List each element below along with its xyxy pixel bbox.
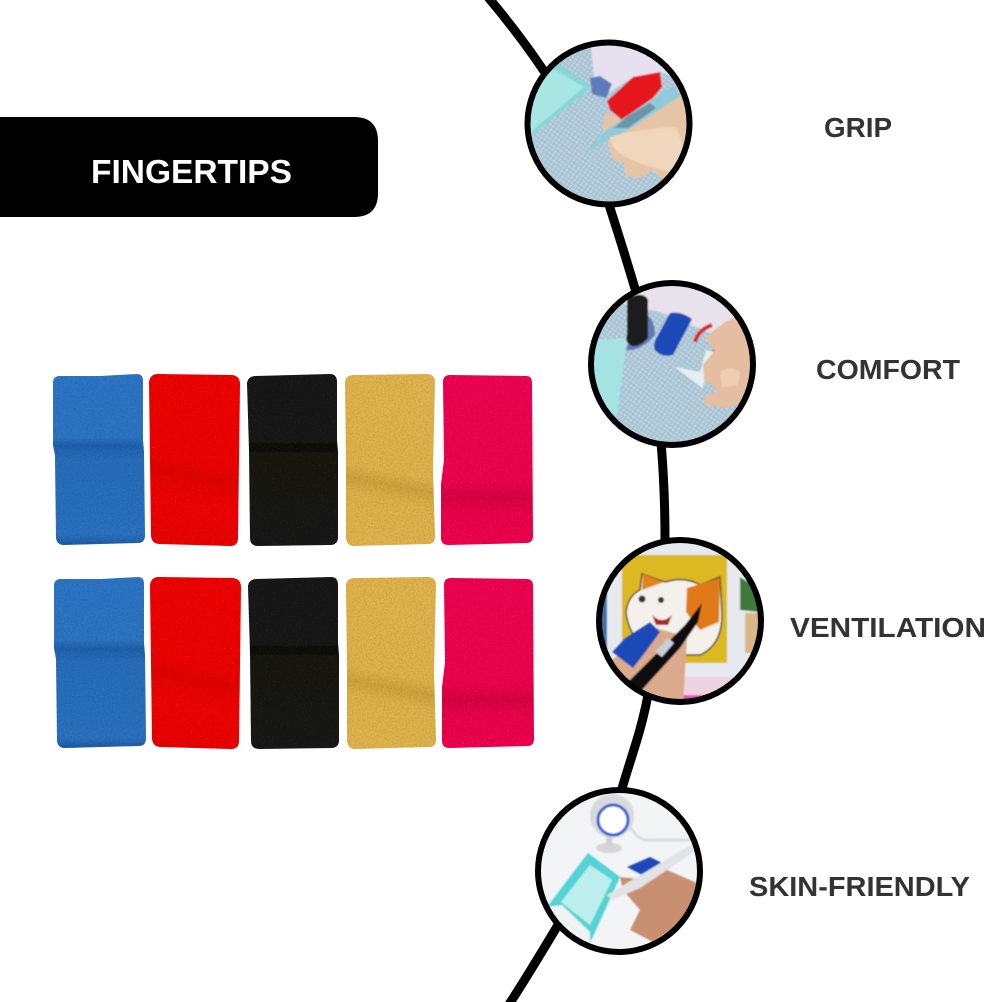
ventilation photo circle	[595, 535, 765, 710]
skin-friendly label: SKIN-FRIENDLY	[749, 871, 970, 902]
yellow sleeve	[346, 577, 436, 749]
pink sleeve	[442, 578, 534, 748]
curved timeline line	[487, 0, 665, 1002]
skin-friendly photo circle	[538, 790, 700, 952]
red sleeve	[149, 374, 240, 546]
feature: ventilation	[595, 535, 986, 710]
feature: grip	[515, 35, 892, 215]
row 2 sleeves	[54, 577, 534, 749]
feature: comfort	[585, 280, 960, 450]
black sleeve	[248, 577, 339, 749]
feature: skin-friendly	[538, 790, 970, 952]
blue sleeve	[53, 374, 145, 545]
grip label: GRIP	[824, 112, 892, 143]
pink sleeve	[441, 375, 533, 545]
grip photo circle	[524, 40, 692, 208]
banner background	[0, 117, 378, 217]
title banner	[0, 117, 378, 217]
blue sleeve	[54, 577, 146, 748]
black sleeve	[247, 374, 338, 546]
comfort photo circle	[585, 280, 760, 450]
red sleeve	[150, 577, 241, 749]
row 1 sleeves	[53, 374, 533, 546]
yellow sleeve	[345, 374, 435, 546]
banner heading: FINGERTIPS	[91, 153, 292, 190]
product photo: two rows of fingertip sleeves	[53, 374, 534, 749]
ventilation label: VENTILATION	[790, 612, 986, 643]
comfort label: COMFORT	[816, 354, 960, 385]
